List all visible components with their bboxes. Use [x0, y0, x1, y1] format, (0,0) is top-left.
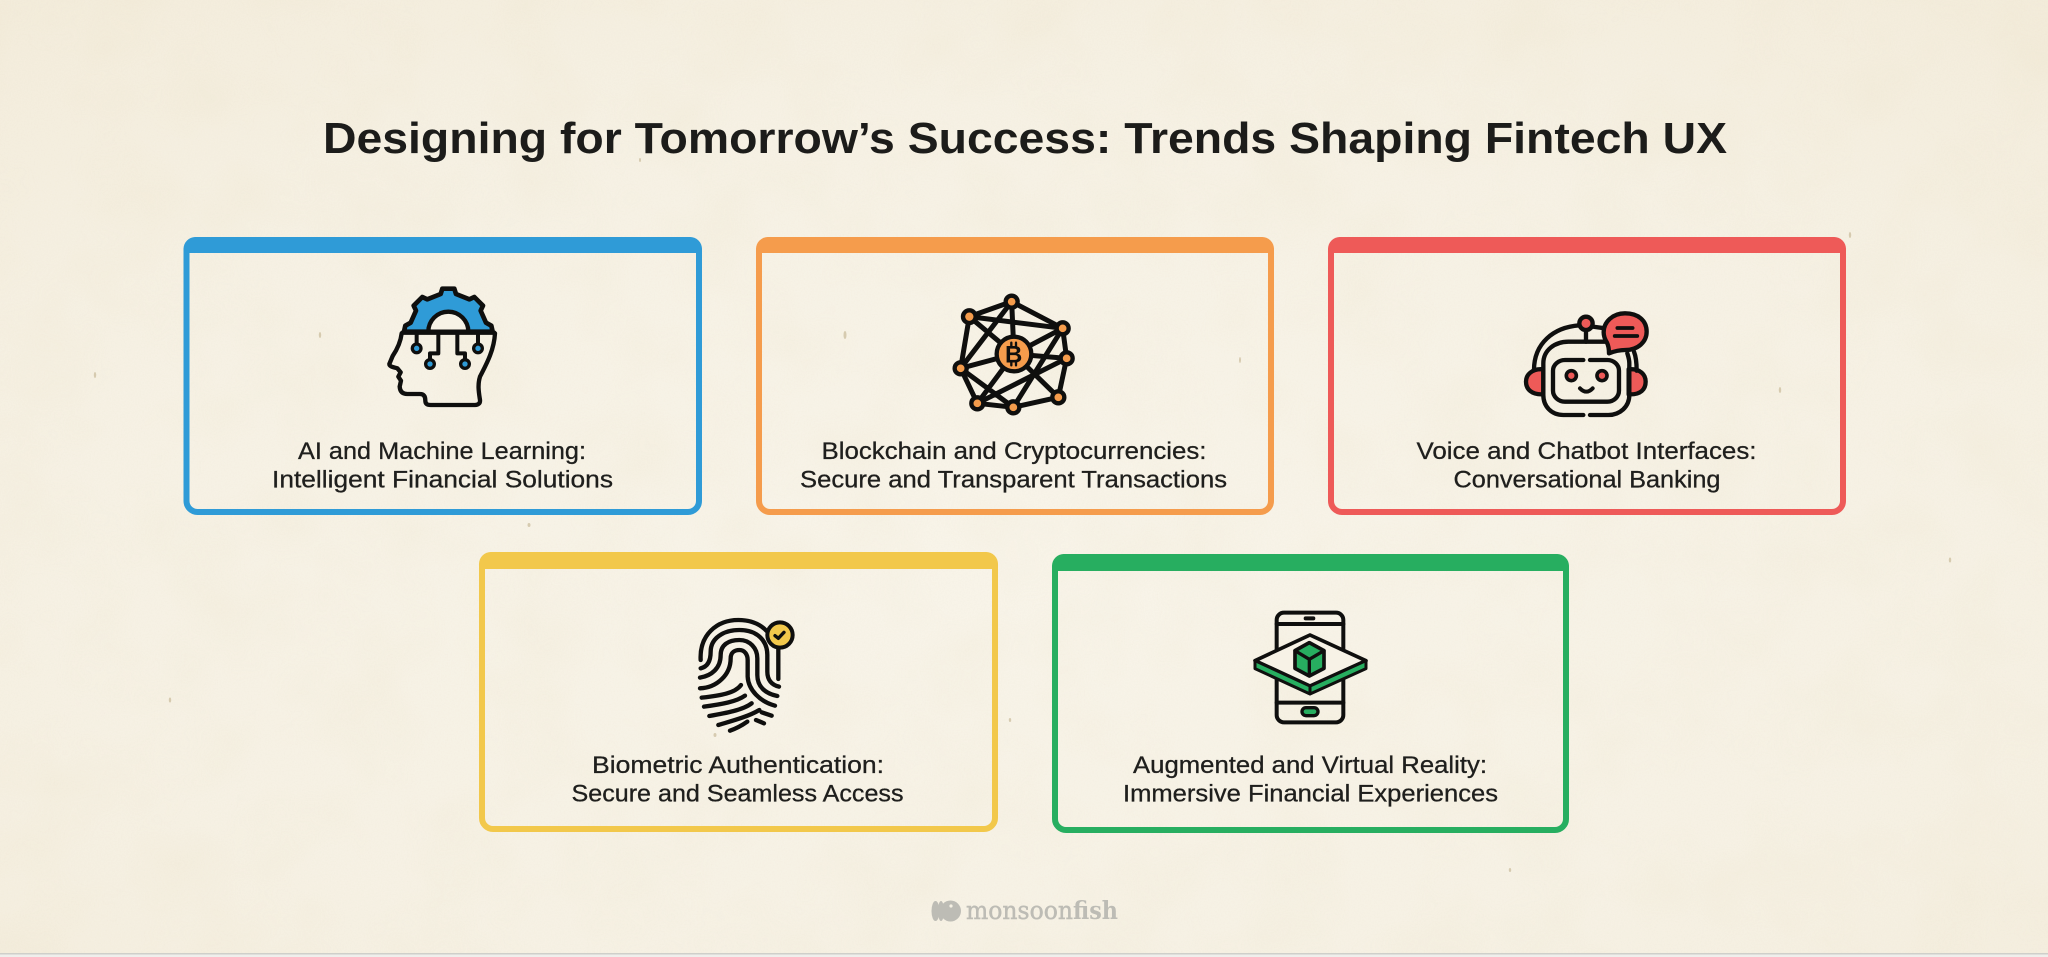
- icon: blockchain network: B: [1005, 342, 1022, 369]
- panel: AI and Machine Learning: [184, 237, 702, 512]
- panel: Biometric Authentication: [479, 552, 998, 829]
- text: Voice and Chatbot Interfaces: Voice and Chatbot Interfaces:: [1416, 438, 1756, 465]
- text: Augmented and Virtual Reality: [1123, 752, 1498, 808]
- panel: Augmented and Virtual Reality: [1052, 554, 1569, 830]
- text: Voice and Chatbot Interfaces: [1416, 438, 1756, 494]
- logo: monsoonfish: [932, 896, 1118, 925]
- icon: fingerprint: [700, 620, 793, 731]
- icon: gear and head: [389, 289, 495, 405]
- text: AI and Machine Learning: [272, 438, 613, 494]
- text: Blockchain and Cryptocurrencies: Blockchain and Cryptocurrencies:: [822, 438, 1206, 465]
- text: Blockchain and Cryptocurrencies: Secure and Transparent Transactions: [800, 466, 1227, 494]
- title: Designing for Tomorrow’s Success: Trends Shaping Fintech UX: [323, 114, 1727, 163]
- text: Biometric Authentication: Biometric Authentication:: [592, 752, 884, 779]
- icon: phone with AR cube: [1255, 613, 1366, 722]
- text: Blockchain and Cryptocurrencies: [800, 438, 1227, 494]
- text: Voice and Chatbot Interfaces: Conversational Banking: [1454, 466, 1720, 494]
- logo: monsoonfish: fish: [1073, 896, 1118, 925]
- icon: blockchain network: [955, 296, 1073, 413]
- text: Biometric Authentication: [572, 752, 904, 808]
- text: AI and Machine Learning: Intelligent Financial Solutions: [272, 466, 613, 494]
- panel: Blockchain and Cryptocurrencies: [756, 237, 1274, 512]
- text: Augmented and Virtual Reality: Augmented and Virtual Reality:: [1133, 752, 1487, 779]
- panel: Voice and Chatbot Interfaces: [1328, 237, 1846, 512]
- text: Biometric Authentication: Secure and Seamless Access: [572, 780, 904, 808]
- text: Augmented and Virtual Reality: Immersive Financial Experiences: [1123, 780, 1498, 808]
- logo: monsoonfish: monsoon: [966, 896, 1073, 925]
- icon: chatbot: [1526, 313, 1647, 415]
- text: AI and Machine Learning: AI and Machine Learning:: [298, 438, 586, 465]
